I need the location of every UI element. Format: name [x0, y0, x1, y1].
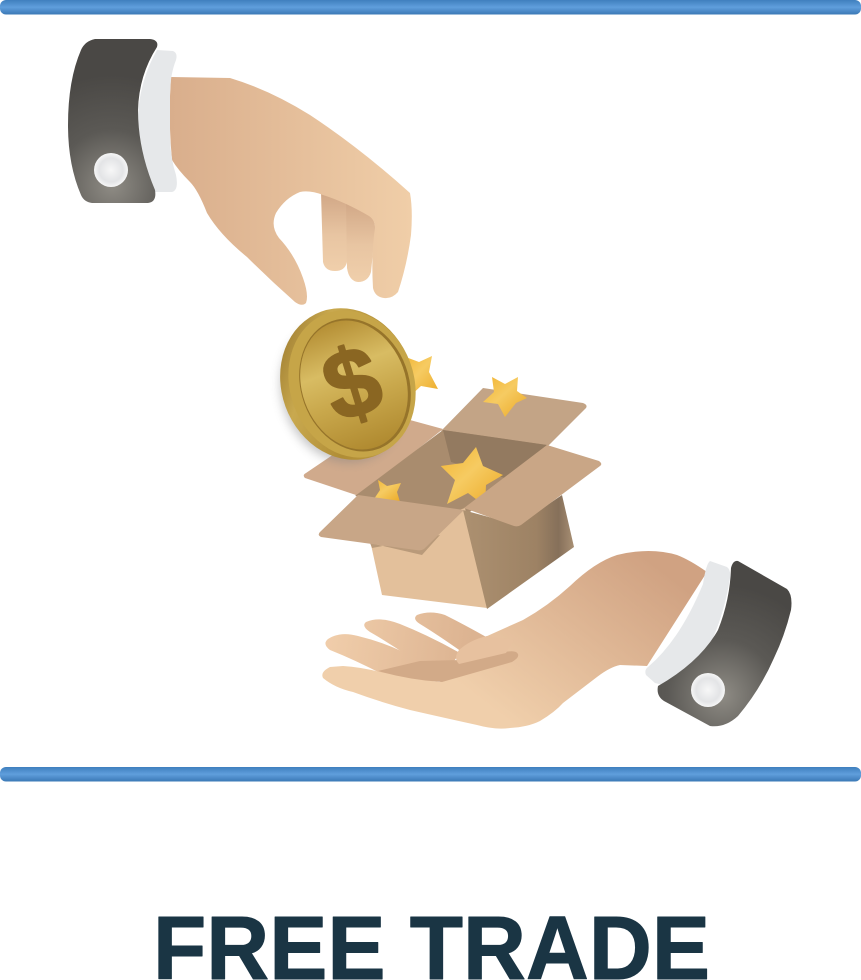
jacket sleeve: [68, 39, 157, 203]
finger 2: [325, 634, 430, 684]
box interior: [355, 430, 547, 512]
palm: [322, 551, 707, 729]
icon: small star: [372, 480, 401, 502]
sleeve button: [691, 673, 725, 707]
icon: gold dollar coin: [259, 289, 436, 480]
front face: [370, 508, 487, 608]
shirt cuff: [645, 561, 730, 685]
icon: star behind coin: [400, 356, 438, 398]
back flap left: [304, 420, 443, 496]
icon: large star: [441, 447, 503, 506]
back fingers: [321, 192, 375, 282]
thumb: [456, 636, 514, 664]
palm crease: [378, 651, 518, 682]
finger 3: [364, 619, 460, 680]
icon: upper giving hand: [68, 39, 412, 305]
bottom blue bar: [0, 767, 861, 782]
hand body: [170, 77, 412, 305]
sleeve button: [94, 153, 128, 187]
jacket sleeve: [658, 561, 792, 726]
dollar sign: $: [310, 323, 394, 443]
icon: open cardboard box: [304, 388, 601, 609]
front flap shadow: [370, 535, 440, 555]
right flap: [464, 445, 601, 526]
front flap: [319, 495, 464, 550]
right face: [463, 495, 574, 609]
top blue bar: [0, 0, 861, 14]
icon: top star on flap: [483, 377, 527, 417]
back flap right: [441, 388, 587, 447]
icon: lower receiving hand: [322, 551, 792, 729]
shirt cuff: [138, 50, 177, 192]
finger 4: [415, 612, 488, 652]
